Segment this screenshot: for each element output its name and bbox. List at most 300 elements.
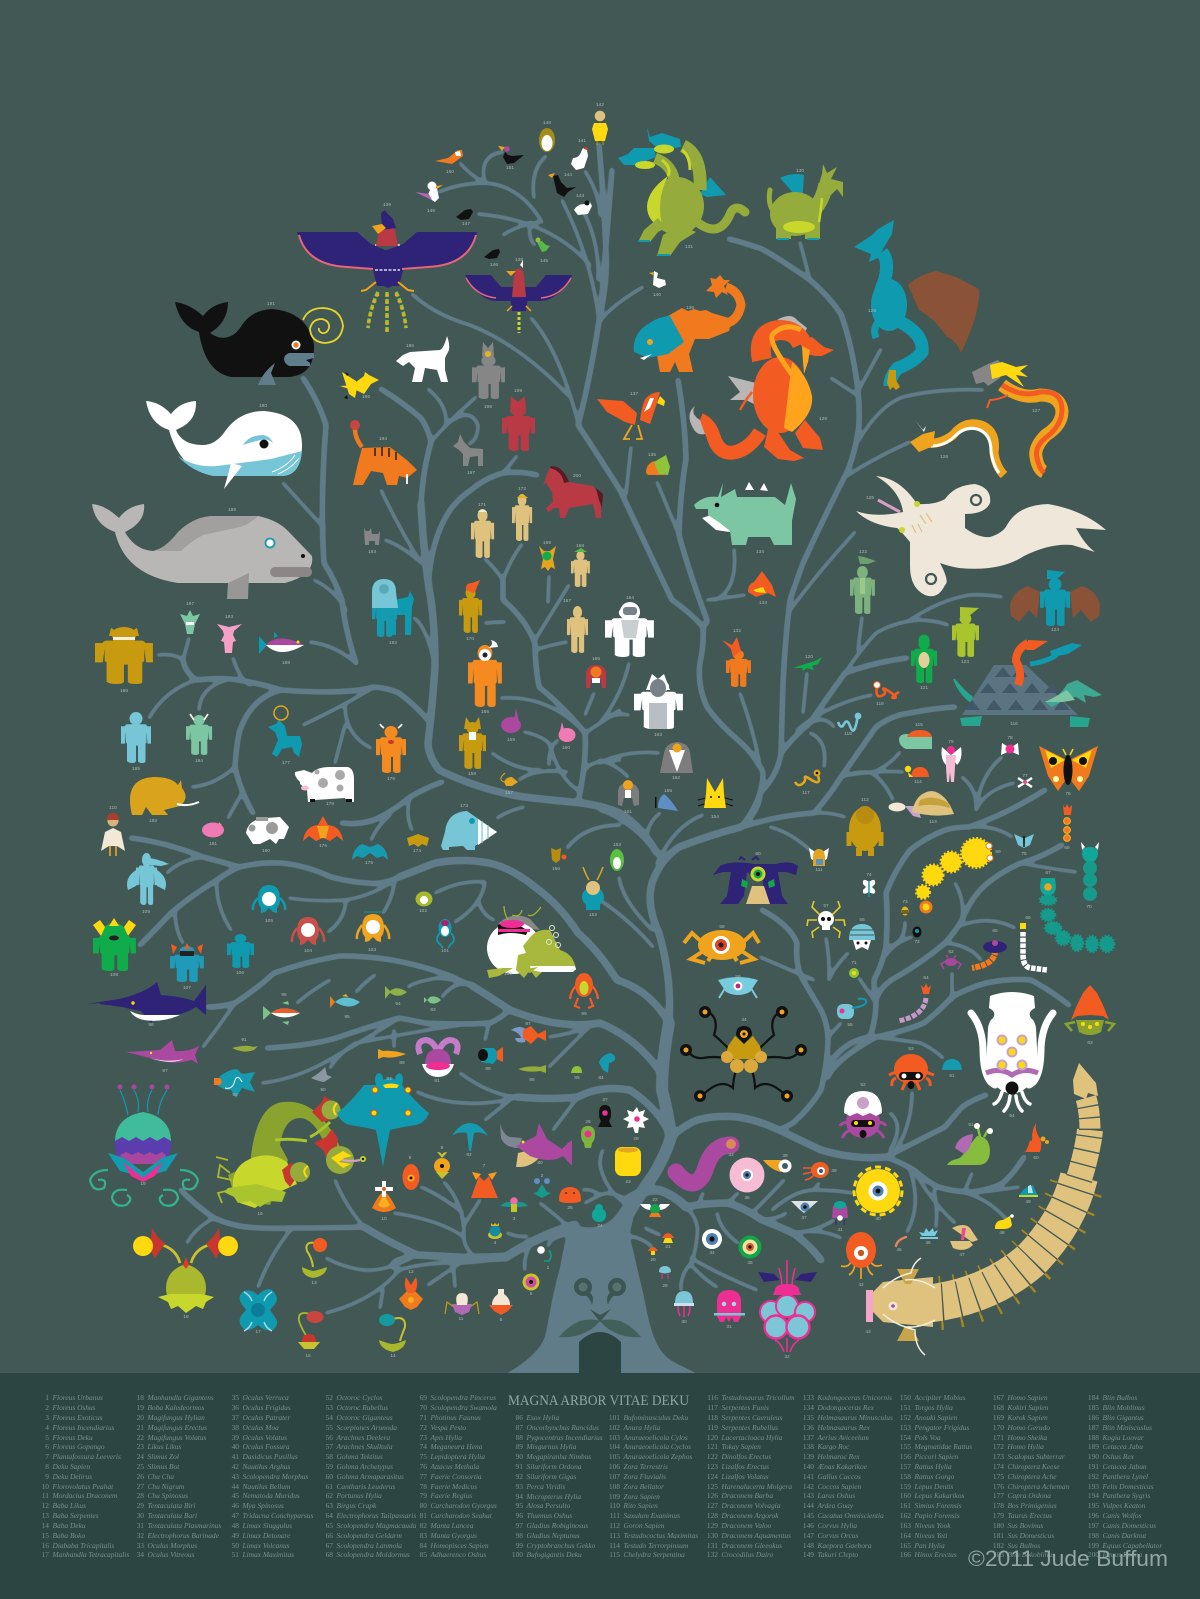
creature 115 turtle (899, 722, 932, 749)
creature 171 sheikah (471, 502, 494, 558)
legend column 3: Nautilus Arghus (242, 1462, 290, 1471)
creature 184 green moblin: 184 (195, 758, 203, 764)
legend column 2: 34 (137, 1550, 144, 1559)
legend column 1: Baba Serpentes (52, 1511, 99, 1520)
creature 72 vespa: 72 (914, 939, 920, 945)
legend column 10: 154 (900, 1432, 911, 1442)
legend column 4: Arachnes Skulltula (336, 1442, 393, 1451)
creature 71 firefly (849, 960, 859, 978)
creature 45 worm: 45 (896, 1247, 902, 1253)
creature 52 octorok purple: 52 (860, 1082, 866, 1088)
creature 113 shell turtle: 113 (929, 819, 937, 825)
legend column 8: Serpentes Funis (722, 1403, 769, 1412)
legend column 5: Attacus Methula (430, 1462, 479, 1471)
creature 40 yellow eye: 40 (875, 1216, 881, 1222)
legend column 1: 7 (45, 1452, 49, 1461)
creature 85 fish (571, 1066, 582, 1081)
legend column 1: 11 (42, 1491, 49, 1500)
legend column 7: Testudo Terrorpinsum (624, 1541, 688, 1550)
creature 105 teal froggy: 105 (265, 918, 273, 924)
legend column 12: 191 (1088, 1462, 1099, 1471)
legend column 1: Deku Delirus (52, 1472, 92, 1481)
legend column 8: 119 (707, 1423, 718, 1432)
legend column 10: Pols Voa (914, 1432, 941, 1442)
creature 160 pink rabbit: 160 (562, 745, 570, 751)
creature 29 jelly: 29 (662, 1283, 668, 1289)
legend column 1: 1 (45, 1393, 49, 1402)
legend column 3: Oculus Volatus (242, 1432, 287, 1442)
creature 191 black whale: 191 (267, 301, 275, 307)
legend column 10: Papio Forensis (914, 1511, 960, 1520)
creature 165 red ape (586, 656, 606, 688)
creature 7 leever (471, 1163, 498, 1198)
legend column 2: 30 (137, 1511, 144, 1520)
creature 87 fish (511, 1021, 546, 1044)
creature 91 siluriform (232, 1037, 258, 1052)
legend column 3: 48 (232, 1521, 239, 1530)
legend column 4: 58 (326, 1452, 333, 1461)
legend column 10: Torgos Hylia (914, 1403, 953, 1412)
legend column 9: Corvus Orcus (818, 1531, 858, 1540)
legend column 11: 177 (993, 1491, 1004, 1500)
legend column 9: 142 (803, 1482, 814, 1491)
legend column 5 (420, 1393, 497, 1559)
legend column 10 (900, 1393, 972, 1559)
legend column 9: 146 (803, 1521, 814, 1530)
creature 58 gold crab: 58 (719, 924, 725, 930)
legend column 1: 17 (42, 1550, 49, 1559)
legend column 6: Micropterus Hylia (526, 1492, 581, 1501)
creature 137 bird orange (597, 391, 665, 439)
creature 88 piranha: 88 (485, 1066, 491, 1072)
legend column 4: Arachnes Deelera (336, 1432, 390, 1442)
creature 129 orange dragon: 129 (819, 416, 827, 422)
creature 148 owl (539, 120, 555, 152)
creature 34 eye (702, 1229, 722, 1256)
legend column 8: 124 (707, 1472, 718, 1481)
creature 48 bee slug (995, 1214, 1014, 1236)
creature 188 purple fish: 188 (282, 660, 290, 666)
legend column 7: 114 (609, 1541, 620, 1550)
creature 109 zora sapien (127, 853, 169, 915)
creature 103 orange froggy (357, 912, 389, 953)
creature 168 kokiri: 168 (576, 543, 584, 549)
creature 192 lynel (372, 579, 414, 646)
legend column 8: Tokay Sapien (722, 1442, 761, 1451)
creature 62 crab: 62 (948, 949, 954, 955)
legend column 9: 138 (803, 1442, 814, 1451)
legend column 10: 165 (900, 1541, 911, 1550)
legend column 3: Nematoda Muridus (242, 1491, 300, 1500)
creature 181 pink pig: 181 (209, 841, 217, 847)
legend column 6: Misgurnus Hylia (526, 1442, 576, 1451)
legend column 10: 164 (900, 1531, 911, 1540)
legend column 5: 82 (420, 1521, 427, 1530)
creature 8 deku sapling (434, 1145, 450, 1179)
legend column 9: 147 (803, 1531, 814, 1540)
legend column 11: Chiroptera Acheman (1008, 1482, 1069, 1491)
legend column 10: 163 (900, 1521, 911, 1530)
creature 113 shell turtle (888, 791, 954, 825)
creature 116 triple turtle: 116 (1010, 721, 1018, 727)
creature 154 pols voice (698, 778, 733, 820)
legend column 10: 161 (900, 1501, 911, 1510)
creature 88 piranha (478, 1047, 503, 1072)
creature 41 small squid (832, 1201, 848, 1233)
creature 59 tripod eye: 59 (735, 974, 741, 980)
legend column 10: Simius Forensis (914, 1501, 962, 1510)
creature 5 flower (522, 1274, 540, 1297)
legend column 3: 41 (232, 1452, 239, 1461)
creature 180 gray hippo (246, 817, 289, 854)
creature 42 nautilus (841, 1232, 882, 1288)
legend column 2: Slimus Zol (148, 1452, 179, 1461)
creature 17 manhandla (240, 1289, 277, 1335)
legend column 9: Ardea Guay (818, 1501, 853, 1510)
legend column 5: Meganeura Hena (430, 1442, 482, 1451)
creature 97 swordfish magenta (126, 1040, 199, 1074)
creature 189 gray whale (92, 504, 312, 599)
legend column 10: 152 (900, 1413, 911, 1422)
legend column 6: 86 (516, 1413, 523, 1422)
creature 143 gull (574, 193, 592, 215)
creature 159 purple rabbit: 159 (507, 737, 515, 743)
legend column 11: Blin Bokoblinus (1008, 1550, 1055, 1559)
legend column 1 (42, 1393, 129, 1559)
creature 80 shark (500, 1123, 572, 1167)
main limbs (474, 1023, 686, 1258)
creature 109 zora sapien: 109 (142, 909, 150, 915)
creature 13 baba serpentes: 13 (311, 1280, 317, 1286)
legend column 1: Deku Sapien (52, 1462, 90, 1471)
creature 6 vase flower (489, 1289, 513, 1323)
legend column 3: Nautilus Bellum (242, 1482, 290, 1491)
creature 23 yellow cylinder: 23 (625, 1179, 631, 1185)
door (579, 1332, 621, 1373)
legend column 1: Diababa Tricapitalis (52, 1541, 114, 1550)
legend column 12: 197 (1088, 1521, 1099, 1530)
creature 152 deer child: 152 (589, 912, 597, 918)
creature 98 swordfish navy: 98 (148, 1022, 154, 1028)
legend column 5: Homopisces Sapien (430, 1541, 489, 1550)
creature 120 small lizard: 120 (805, 654, 813, 660)
creature 200 horse: 200 (573, 473, 581, 479)
creature 130 horned dragon: 130 (796, 168, 804, 174)
legend column 8: Draconem Volvagia (722, 1501, 780, 1510)
legend column 2: Manhandla Gigantens (148, 1393, 214, 1402)
creature 139 helmaroc king: 139 (383, 202, 391, 208)
creature 117 yellow worm (795, 770, 820, 796)
creature 12 baba likus: 12 (408, 1269, 414, 1275)
creature 183 pink bokoblin: 183 (225, 614, 233, 620)
creature 163 yook (634, 674, 683, 738)
creature 135 helmasaurus small: 135 (648, 452, 656, 458)
legend column 11: 175 (993, 1472, 1004, 1481)
creature 121 green tokay (911, 634, 937, 691)
legend column 6: Megapiranha Nimbus (526, 1452, 591, 1461)
legend column 6: 100 (512, 1550, 523, 1559)
creature 181 pink pig (202, 822, 224, 847)
legend column 5: Vespa Pesto (430, 1423, 466, 1432)
creature 61 cantharis (942, 1059, 962, 1079)
legend column 5: 83 (420, 1531, 427, 1540)
legend column 5: 80 (420, 1501, 427, 1510)
creature 86 esox (518, 1065, 546, 1083)
legend column 6: 87 (516, 1423, 523, 1432)
legend column 8: 130 (707, 1531, 718, 1540)
creature 23 yellow cylinder (615, 1147, 641, 1185)
creature 37 winged eye (791, 1201, 818, 1221)
legend column 5: Carcharodon Gyorgus (430, 1501, 497, 1510)
creature 102 frog: 102 (419, 908, 427, 914)
creature 97 swordfish magenta: 97 (162, 1068, 168, 1074)
legend column 4: 55 (326, 1423, 333, 1432)
creature 130 horned dragon (769, 164, 843, 239)
creature 89 misgurnus (378, 1049, 406, 1066)
legend column 6: 95 (516, 1501, 523, 1510)
legend column 12: Blin Gigantus (1102, 1413, 1144, 1422)
creature 170 gerudo: 170 (466, 636, 474, 642)
creature 137 bird orange: 137 (630, 391, 638, 397)
legend column 2: Magifungus Volatus (148, 1432, 206, 1442)
legend column 1: Plantafossura Leeveris (52, 1452, 121, 1461)
legend column 4: 61 (326, 1482, 333, 1491)
creature 21 fungus (662, 1233, 674, 1250)
legend column 8: Lacertacloaca Hylia (722, 1432, 782, 1442)
creature 9 deku delirus (402, 1155, 420, 1190)
legend column 11: 174 (993, 1462, 1004, 1471)
legend column 11: 171 (993, 1432, 1004, 1442)
creature 177 deer: 177 (282, 760, 290, 766)
creature 177 deer (268, 706, 302, 766)
creature 147 crow: 147 (462, 221, 470, 227)
creature 132 crocodile: 132 (733, 628, 741, 634)
creature 186 gold ogre: 186 (120, 688, 128, 694)
legend column 9: 135 (803, 1413, 814, 1422)
creature 196 wolfos: 196 (406, 343, 414, 349)
legend column 4: Octoroc Giganteus (336, 1413, 393, 1422)
creature 10 peahat: 10 (381, 1216, 387, 1222)
creature 22 winged fungus (640, 1197, 670, 1217)
legend column 4: 54 (326, 1413, 333, 1422)
legend column 10: Niveus Yook (914, 1521, 951, 1530)
legend column 5: 84 (420, 1541, 427, 1550)
creature 4 crowned bud (488, 1223, 502, 1246)
legend column 7: Rito Sapien (624, 1501, 658, 1510)
legend column 6: 99 (516, 1541, 523, 1550)
legend column 6: 92 (516, 1472, 523, 1481)
creature 173 mole: 173 (460, 803, 468, 809)
creature 108 green zora (93, 918, 136, 978)
creature 145 parrot (536, 238, 550, 264)
legend column 5: 81 (420, 1511, 427, 1520)
legend column 12: Canis Darknut (1102, 1531, 1146, 1540)
creature 49 slug: 49 (1025, 1199, 1031, 1205)
legend column 2: 24 (137, 1452, 144, 1461)
creature 95 fish: 95 (344, 1014, 350, 1020)
creature 138 small rito bird (465, 257, 572, 333)
creature 169 korok: 169 (543, 540, 551, 546)
creature 164 yeti (605, 595, 654, 657)
legend column 7: 112 (609, 1521, 620, 1530)
legend column 11: Sus Bulbos (1008, 1541, 1040, 1550)
creature 27 black chu: 27 (602, 1097, 608, 1103)
creature 43 scolopendra (865, 1063, 1098, 1355)
creature 168 kokiri (571, 543, 590, 587)
creature 105 teal froggy (253, 885, 285, 924)
legend column 2: 19 (137, 1403, 144, 1412)
legend column 8: Serpentes Caeruleus (722, 1413, 782, 1422)
legend column 8: Draconem Gleeokus (722, 1541, 782, 1550)
creature 140 duck: 140 (653, 292, 661, 298)
legend column 5: Adhaerenco Oshus (430, 1550, 486, 1559)
creature 199 red man: 199 (514, 388, 522, 394)
legend column 4: Gohma Armaparasitus (336, 1472, 404, 1481)
legend column 7: Zora Fluvialis (624, 1472, 666, 1481)
creature 98 swordfish navy (87, 982, 206, 1028)
legend column 5: Photinus Faunus (430, 1413, 481, 1422)
legend column 2: Oculus Morphus (148, 1541, 197, 1550)
creature 66 white chain (1020, 915, 1047, 970)
creature 75 butterfly: 75 (1021, 851, 1027, 857)
legend column 12: Blin Miniscuslus (1102, 1423, 1152, 1432)
legend column 3: Dasidicus Pusillus (242, 1452, 298, 1461)
legend column 8: 118 (707, 1413, 718, 1422)
creature 56 blue spider (849, 917, 875, 950)
legend column 10: Lepus Kakarikos (914, 1491, 964, 1500)
creature 182 mammoth (130, 777, 199, 824)
legend column 11: 182 (993, 1541, 1004, 1550)
legend column 9: Aerius Aviceelum (818, 1432, 869, 1442)
legend column 4: Electrophorus Tailpassaris (336, 1511, 416, 1520)
creature 78 faerie: 78 (1007, 735, 1013, 741)
legend column 4: Cantharis Leuderus (336, 1482, 395, 1491)
legend column 9: 148 (803, 1541, 814, 1550)
creature 124 winged lizalfos: 124 (1051, 627, 1059, 633)
twigs (149, 152, 1076, 1313)
legend column 10: 162 (900, 1511, 911, 1520)
legend column 7: 109 (609, 1492, 620, 1501)
legend column 6: Siluriform Gigas (526, 1472, 576, 1481)
legend column 9: 134 (803, 1403, 814, 1412)
creature 82 small manta (452, 1123, 488, 1158)
legend column 7: Zora Sapien (624, 1492, 660, 1501)
legend column 6: Alosa Persulto (526, 1501, 570, 1510)
creature 191 black whale (175, 301, 343, 385)
creature 164 yeti: 164 (626, 595, 634, 601)
legend column 9: 145 (803, 1511, 814, 1520)
legend column 5: 78 (420, 1482, 427, 1491)
creature 111 winged statue (809, 848, 829, 873)
creature 100 giant frog: 100 (504, 971, 512, 977)
legend column 6: 91 (516, 1462, 523, 1471)
legend column 4: Scorpiones Arunoda (336, 1423, 397, 1432)
creature 133 red lizard (748, 571, 776, 606)
creature 128 teal dragon (854, 220, 979, 390)
creature 11 mordacius: 11 (459, 1316, 464, 1322)
legend column 1: Floreus Deku (52, 1432, 93, 1442)
legend column 3: 47 (232, 1511, 239, 1520)
creature 165 red ape: 165 (592, 656, 600, 662)
legend column 3: 37 (232, 1413, 239, 1422)
legend column 7: Goron Sapien (624, 1521, 664, 1530)
creature 139 helmaroc king (297, 202, 477, 332)
legend column 11: 180 (993, 1521, 1004, 1530)
legend column 9: Helmaroc Rex (818, 1452, 860, 1461)
legend column 11: Taurus Erectus (1008, 1511, 1052, 1520)
legend column 3: Tridacna Conchyparsus (242, 1511, 313, 1520)
legend column 1: Floreus Incendiarius (52, 1423, 114, 1432)
legend column 5: Faerie Consortia (430, 1472, 482, 1481)
legend column 11: 167 (993, 1393, 1004, 1402)
legend column 2: 22 (137, 1432, 144, 1442)
creature 121 green tokay: 121 (920, 685, 928, 691)
legend column 4: Portunus Hylia (336, 1491, 382, 1500)
creature 51 slug (947, 1122, 993, 1165)
creature 116 triple turtle (953, 640, 1102, 727)
legend column 8: Crocodilus Dairo (722, 1550, 773, 1559)
legend column 12: Canis Domesticus (1102, 1521, 1156, 1530)
legend column 1: Floreus Oshus (52, 1403, 96, 1412)
legend column 10: Pan Hylia (914, 1541, 945, 1550)
creature 7 leever: 7 (483, 1163, 486, 1169)
legend column 2: 21 (137, 1423, 144, 1432)
creature 125 molgera: 125 (866, 495, 874, 501)
creature 14 baba deku: 14 (390, 1353, 396, 1359)
creature 24 slime (592, 1204, 606, 1229)
legend column 6: 96 (516, 1511, 523, 1520)
legend column 5: Manta Gyorgus (430, 1531, 477, 1540)
legend column 6: Oncorhynchus Rancidus (526, 1423, 599, 1432)
creature 141 chicken: 141 (578, 138, 586, 144)
legend column 6: 89 (516, 1442, 523, 1451)
legend column 7: Zora Bellator (624, 1482, 664, 1491)
legend column 8: Draconem Argorok (722, 1511, 778, 1520)
creature 39 orange eye (803, 1162, 837, 1180)
creature 15 baba boko: 15 (305, 1353, 311, 1359)
legend column 1: 13 (42, 1511, 49, 1520)
legend column 10: 156 (900, 1452, 911, 1461)
legend column 5: 73 (420, 1432, 427, 1442)
legend column 4: Scolopendra Geldarm (336, 1531, 402, 1540)
creature 99 salamander (570, 973, 598, 1017)
creature 178 cow (295, 767, 354, 807)
legend column 1: Floreus Urbanus (52, 1393, 103, 1402)
legend column 2: Magifungus Erectus (148, 1423, 207, 1432)
creature 190 white whale: 190 (259, 403, 267, 409)
legend column 6: Thunnus Oshus (526, 1511, 572, 1520)
creature 47 clam (950, 1225, 978, 1258)
creature 155 rat blue: 155 (664, 788, 672, 794)
legend column 1: 3 (45, 1413, 49, 1422)
legend column 11: Scalopus Subterrar (1008, 1452, 1065, 1461)
creature 149 white vulture (415, 182, 443, 214)
creature 32 barinade: 32 (784, 1354, 790, 1360)
legend column 4: Gohma Tektitus (336, 1452, 383, 1461)
legend column 12: Kogia Loovar (1102, 1432, 1144, 1442)
creature 193 cat (364, 528, 380, 555)
right eye (607, 1278, 626, 1305)
legend column 5: Faerie Medicus (430, 1482, 477, 1491)
creature 117 yellow worm: 117 (802, 790, 810, 796)
creature 62 crab (941, 949, 961, 969)
creature 3 winged flower: 3 (513, 1216, 516, 1222)
creature 96 fish: 96 (281, 992, 287, 998)
creature 53 octorok red (889, 1046, 934, 1090)
tree face (559, 1278, 641, 1373)
legend column 1: Baba Boko (52, 1531, 85, 1540)
legend column 9: Gallus Cuccos (818, 1472, 861, 1481)
